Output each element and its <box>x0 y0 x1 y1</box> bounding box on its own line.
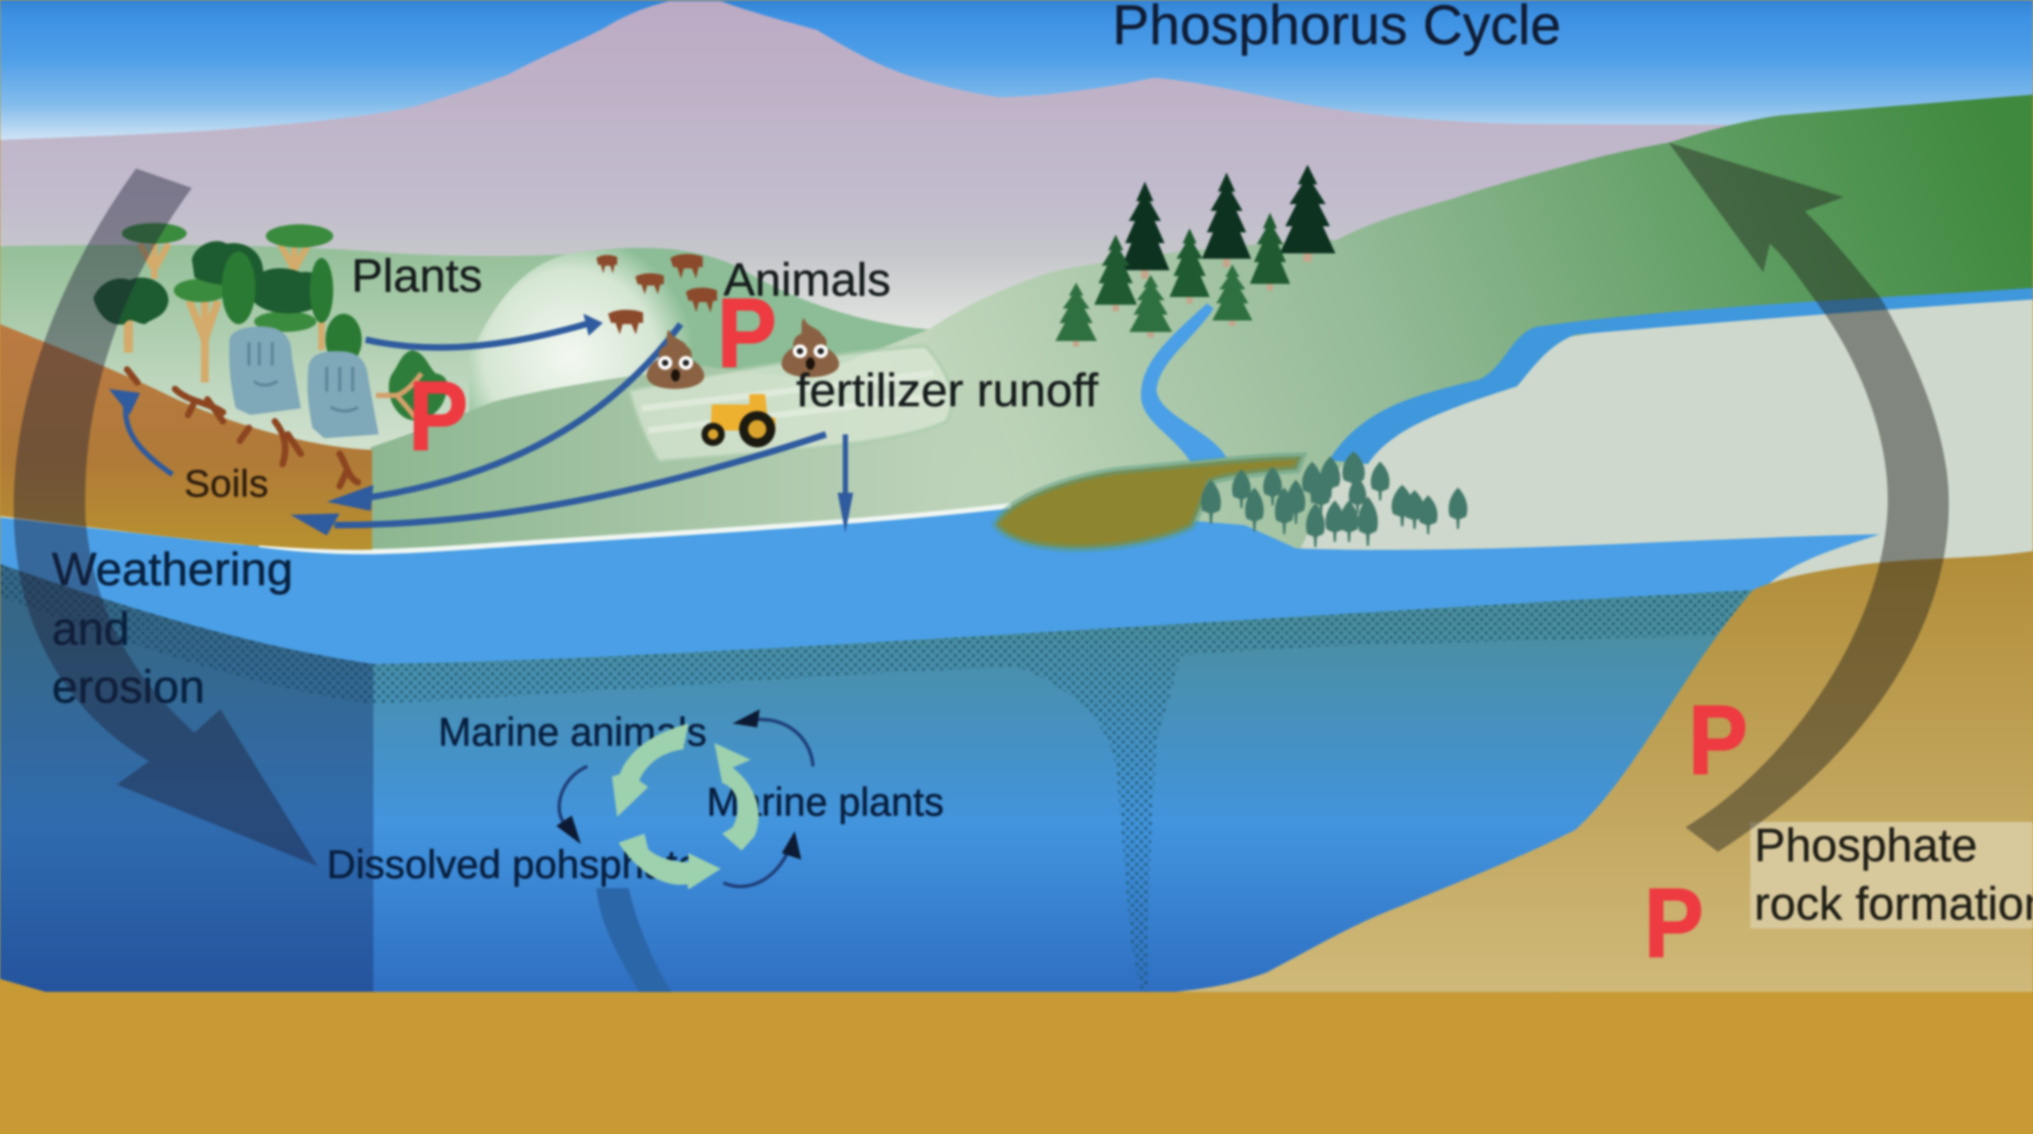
shaded cross section of coastal water <box>0 564 373 993</box>
back green hill <box>0 245 570 545</box>
red P markers: P <box>1688 685 1748 795</box>
land labels: Plants <box>351 250 482 302</box>
marine labels: Dissolved pohsphate <box>327 842 700 887</box>
light pines <box>1055 265 1252 347</box>
tall cypress trees <box>222 252 362 366</box>
red P markers: P <box>717 278 777 388</box>
land labels: Soils <box>184 463 268 505</box>
left foreground hill <box>371 366 1037 558</box>
crop field <box>629 346 952 462</box>
dark broadleaf canopies <box>93 241 325 325</box>
weathering and erosion label: erosion <box>52 661 205 713</box>
large uplift arrow <box>1669 143 1949 852</box>
dark pines <box>1120 165 1335 279</box>
gravestone right <box>308 351 379 438</box>
land labels <box>184 250 1099 505</box>
land labels: fertilizer runoff <box>796 364 1099 416</box>
phosphate label background <box>1750 822 2033 928</box>
sky background <box>0 0 2033 140</box>
ocean surface water <box>0 506 1880 998</box>
grazing animals <box>596 254 717 335</box>
pale coastal plain <box>1297 296 2033 609</box>
phosphate rock formation label: Phosphate <box>1754 819 1977 871</box>
phosphate rock layer <box>1173 551 2033 992</box>
marine cycle dark arrows <box>556 709 813 886</box>
tree trunks <box>128 240 322 382</box>
tree canopies <box>122 223 333 332</box>
sandy sea floor <box>0 979 2033 1134</box>
red P markers: P <box>408 361 468 471</box>
red P markers: P <box>1644 868 1704 978</box>
marine labels <box>327 710 944 887</box>
mauve mountain <box>0 1 2033 389</box>
weathering and erosion label <box>52 543 293 713</box>
coastal mangrove trees <box>1201 451 1467 547</box>
marine labels: Marine plants <box>707 780 944 825</box>
main river <box>1329 288 2033 464</box>
mountain stream <box>1141 303 1227 462</box>
weathering and erosion label: and <box>52 602 130 654</box>
marine labels: Marine animals <box>438 710 707 755</box>
stippled upwelling layer <box>0 564 1753 991</box>
poop emoji left <box>647 329 704 389</box>
blue flow arrow: soil to plants <box>109 389 172 475</box>
plant roots <box>127 370 358 486</box>
pine forest <box>1055 165 1335 347</box>
gravestone left <box>229 327 301 415</box>
shrub with exposed trunk <box>376 350 447 421</box>
soil wedge <box>0 324 372 550</box>
blue flow arrow: fertilizer runoff to soil <box>290 434 826 535</box>
phosphate rock formation label <box>1754 819 2033 929</box>
poop emoji right <box>782 318 839 377</box>
red P markers <box>408 278 1748 978</box>
large weathering and erosion arrow <box>14 169 318 866</box>
middle pines <box>1094 213 1290 312</box>
blue flow arrow: plants to animals <box>366 314 603 347</box>
forest of plants <box>93 223 362 382</box>
deep ocean water <box>0 564 1753 993</box>
lower blue arc from dissolved phosphate <box>596 888 672 992</box>
blue flow arrow: runoff to ocean <box>838 434 853 533</box>
marine cycle green arrows <box>612 723 759 889</box>
tractor <box>701 394 775 447</box>
land labels: Animals <box>723 254 891 306</box>
weathering and erosion label: Weathering <box>52 543 293 595</box>
animal pasture mound <box>469 248 928 441</box>
blue flow arrow: animals to soil <box>327 324 681 511</box>
main green hillside <box>778 95 2033 558</box>
white shoreline <box>259 506 1011 552</box>
river delta <box>996 456 1302 548</box>
